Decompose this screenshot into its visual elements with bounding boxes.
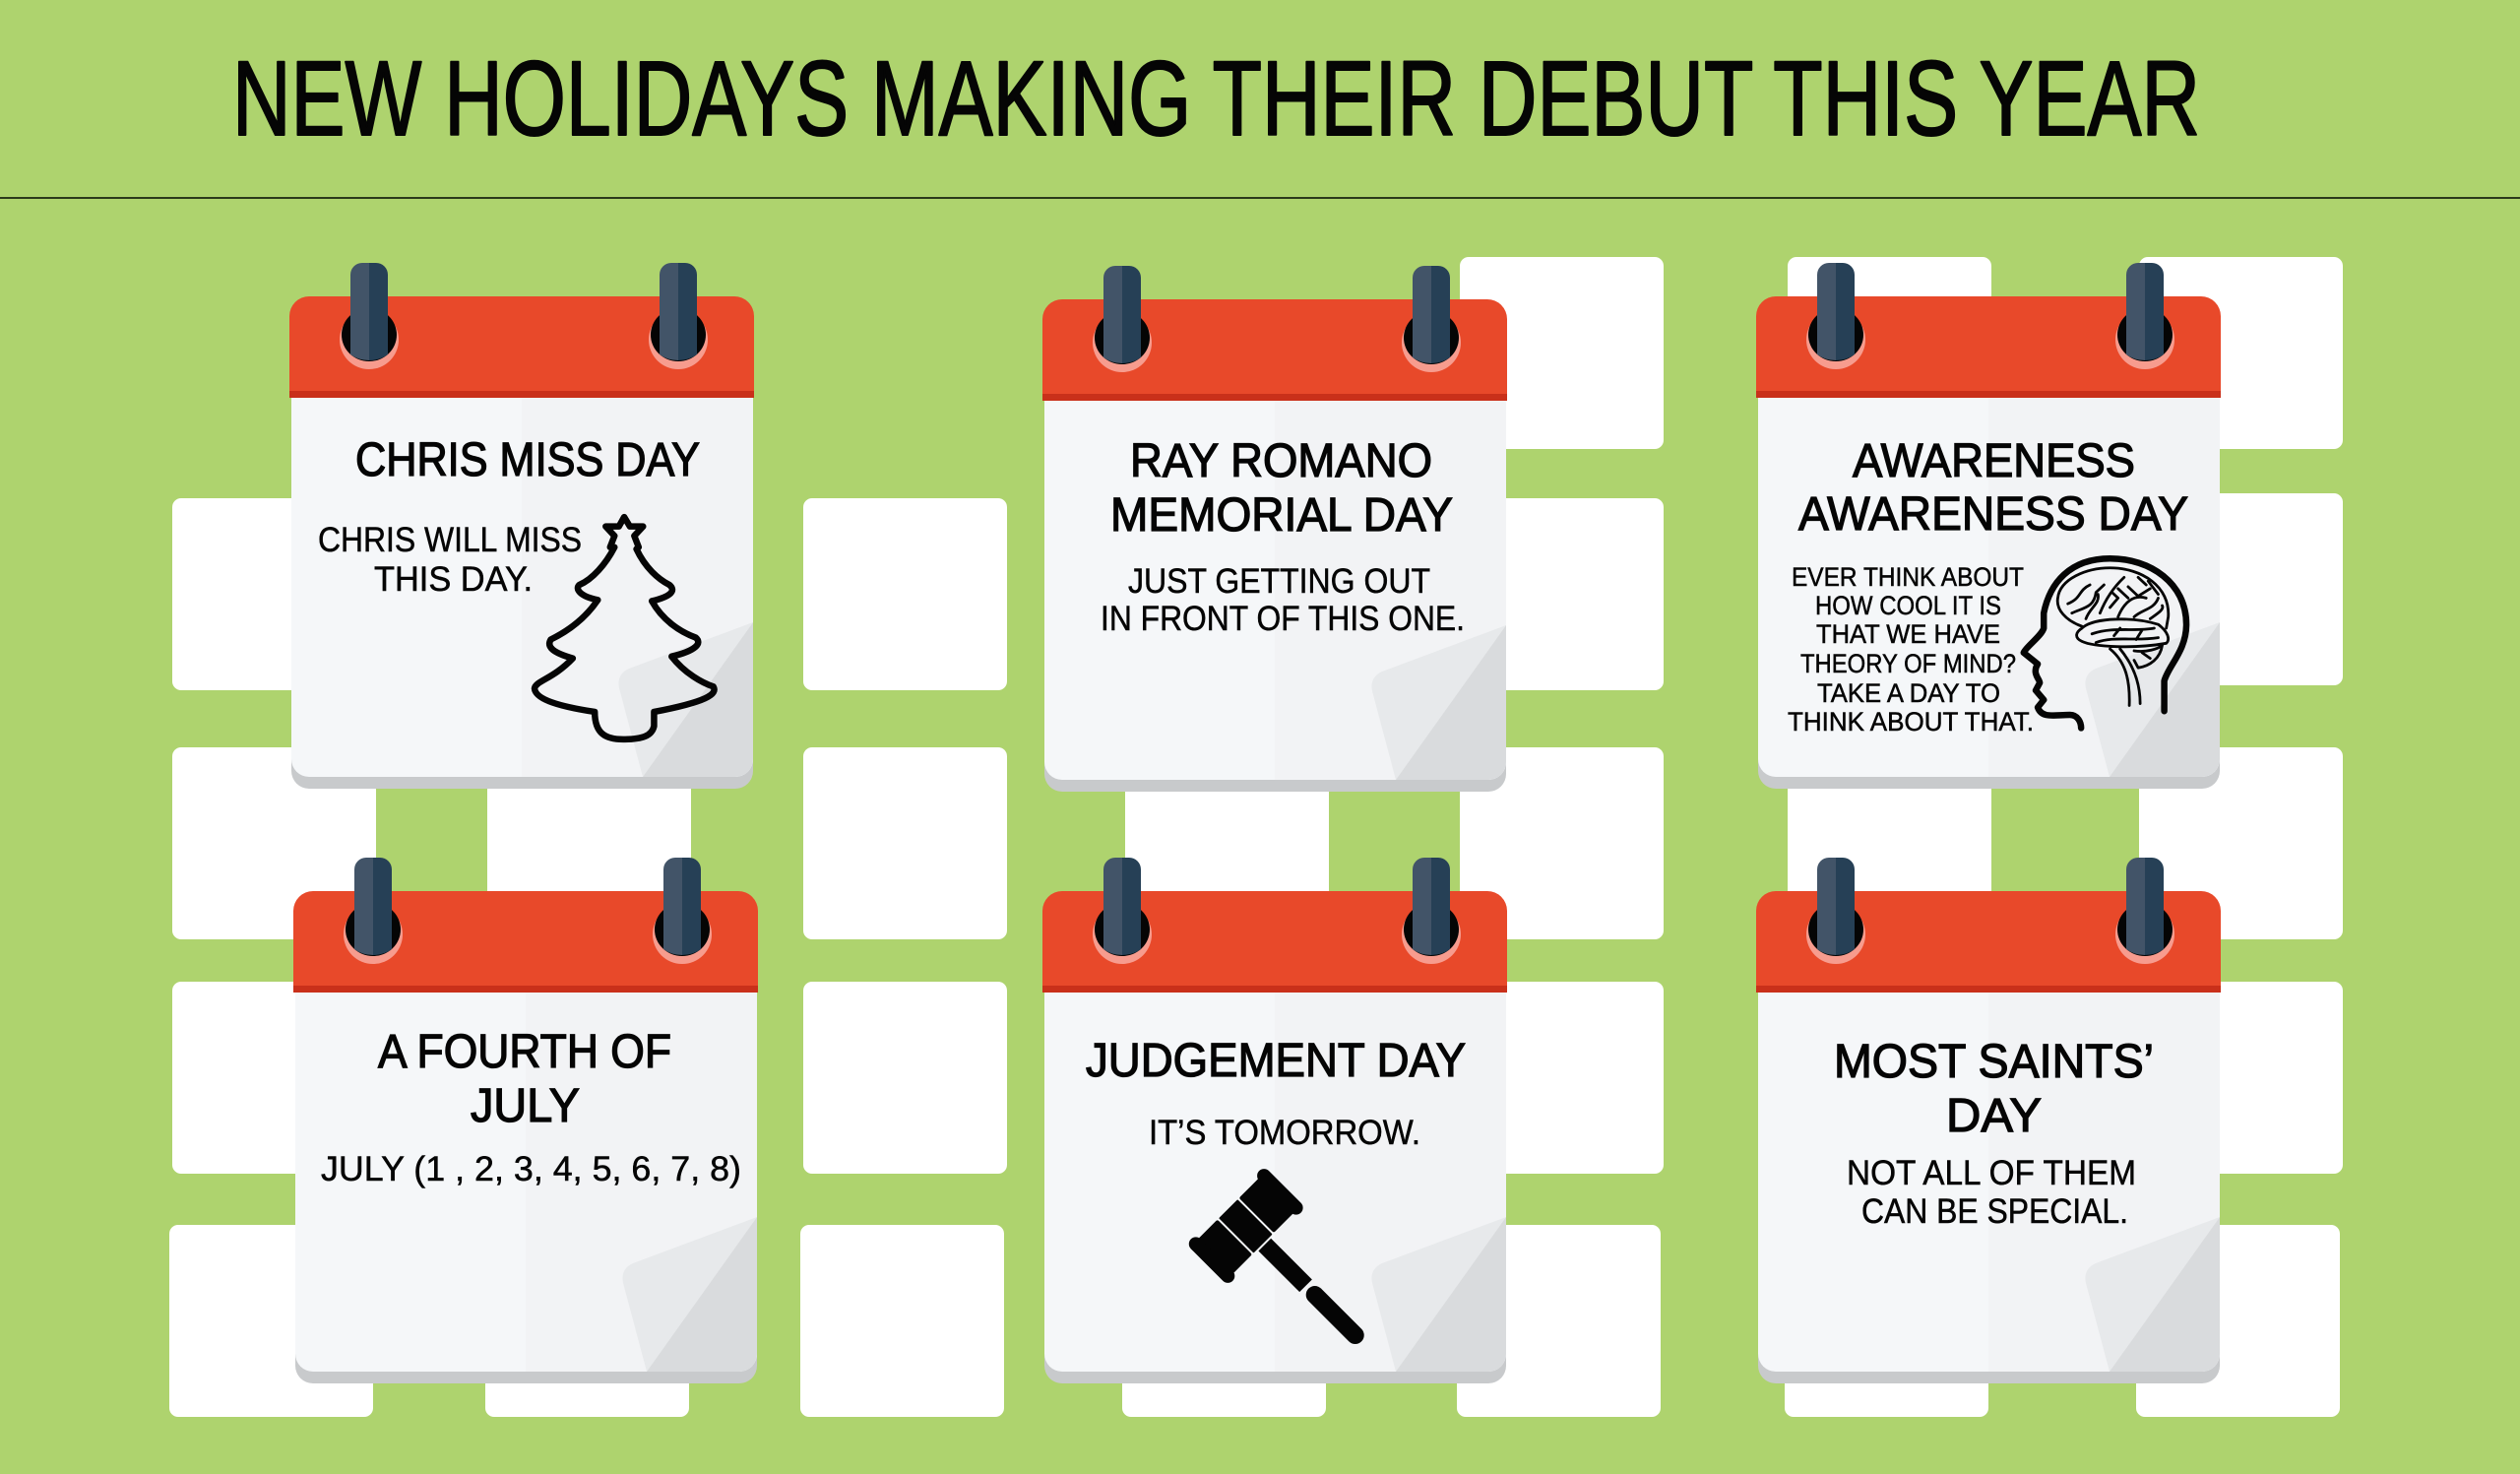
icon: gavel <box>1186 1166 1401 1380</box>
text: Just getting out in front of this one <box>1101 562 1465 638</box>
text: July 1 to 8: JULY (1 , 2, 3, 4, 5, 6, 7, 8) <box>321 1150 741 1188</box>
text: theory of mind: TAKE A DAY TO <box>1817 678 2000 708</box>
heading: Ray Romano Memorial Day: MEMORIAL DAY <box>1110 489 1453 542</box>
text: Chris will miss this day <box>318 521 582 599</box>
panel: Chris Miss Day <box>289 263 754 789</box>
heading: A Fourth of July <box>378 1026 671 1132</box>
heading: Chris Miss Day: CHRIS MISS DAY <box>355 434 700 486</box>
panel: Judgement Day <box>1042 858 1507 1383</box>
text: Not all of them can be special: CAN BE SPECIAL. <box>1861 1192 2128 1231</box>
text: Chris will miss this day: CHRIS WILL MISS <box>318 521 582 559</box>
panel: A Fourth of July <box>293 858 758 1383</box>
heading: Most Saints' Day: DAY <box>1946 1090 2042 1142</box>
text: theory of mind: THINK ABOUT THAT. <box>1788 707 2034 737</box>
text: theory of mind: THAT WE HAVE <box>1816 619 2000 649</box>
icon: head with brain <box>2024 558 2186 728</box>
heading: Most Saints' Day <box>1834 1036 2154 1142</box>
text: Just getting out in front of this one: JUST GETTING OUT <box>1128 562 1430 601</box>
text: It's tomorrow: IT’S TOMORROW. <box>1149 1114 1420 1152</box>
text: Just getting out in front of this one: IN FRONT OF THIS ONE. <box>1101 600 1465 638</box>
heading: Ray Romano Memorial Day: RAY ROMANO <box>1130 435 1432 487</box>
heading: Awareness Awareness Day: AWARENESS DAY <box>1798 488 2188 541</box>
text: Not all of them can be special: NOT ALL OF THEM <box>1847 1154 2136 1192</box>
header divider line <box>0 197 2520 199</box>
text: theory of mind: THEORY OF MIND? <box>1800 649 2016 678</box>
icon: christmas tree <box>535 517 715 739</box>
heading: Ray Romano Memorial Day <box>1110 435 1453 542</box>
heading: A Fourth of July: A FOURTH OF <box>378 1026 671 1078</box>
text: theory of mind: EVER THINK ABOUT <box>1792 562 2024 592</box>
heading: Awareness Awareness Day <box>1798 435 2188 541</box>
text: theory of mind: HOW COOL IT IS <box>1815 591 2001 620</box>
panel: Most Saints' Day <box>1756 858 2221 1383</box>
text: theory of mind <box>1788 562 2034 737</box>
heading: Awareness Awareness Day: AWARENESS <box>1853 435 2135 487</box>
panel: Ray Romano Memorial Day <box>1042 266 1507 792</box>
heading: A Fourth of July: JULY <box>471 1080 580 1132</box>
text: Chris will miss this day: THIS DAY. <box>374 560 533 599</box>
heading: Judgement Day: JUDGEMENT DAY <box>1086 1035 1466 1087</box>
panel: Awareness Awareness Day <box>1756 263 2221 789</box>
calendar grid background squares <box>169 257 2343 1417</box>
heading: Most Saints' Day: MOST SAINTS’ <box>1834 1036 2154 1088</box>
text: Not all of them can be special <box>1847 1154 2136 1231</box>
